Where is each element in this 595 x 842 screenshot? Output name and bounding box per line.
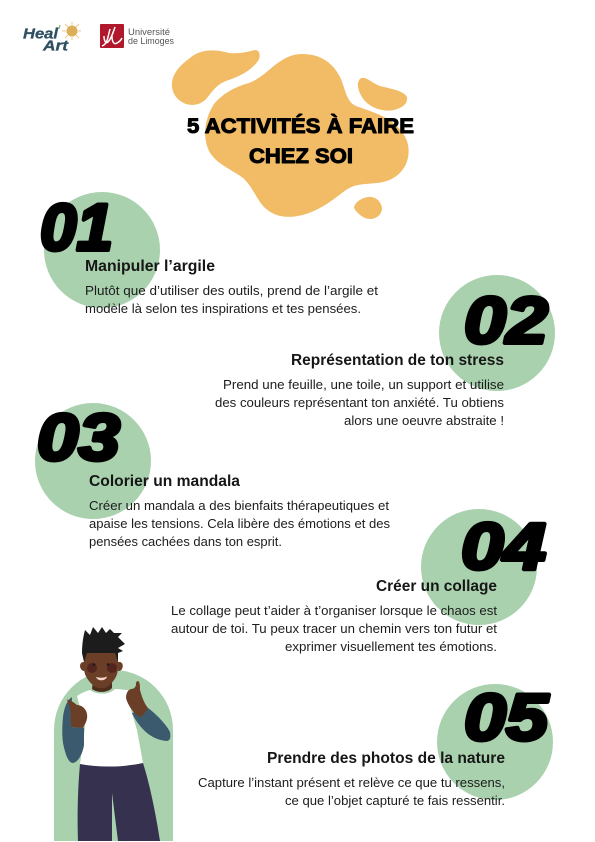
logo: Heal'Art: Art xyxy=(42,38,69,54)
panel: activity 02: des couleurs représentant ton anxiété. Tu obtiens xyxy=(215,396,504,410)
panel: activity 04 xyxy=(171,509,546,654)
panel: activity 03: Colorier un mandala xyxy=(89,473,240,490)
right sleeve xyxy=(132,708,170,741)
logo: Université de Limoges: Université xyxy=(128,27,170,37)
left hand xyxy=(67,700,87,728)
logo: Heal'Art: Heal xyxy=(23,26,59,42)
right hand with thumb xyxy=(126,681,148,717)
panel: activity 02: Représentation de ton stress xyxy=(291,352,504,369)
panel: activity 02 xyxy=(215,275,555,428)
panel: activity 05: Capture l’instant présent et relève ce que tu ressens, xyxy=(198,776,505,790)
decorative orange blob behind the title xyxy=(172,50,409,219)
panel: activity 01: modèle là selon tes inspirations et tes pensées. xyxy=(85,302,361,316)
panel: activity 02: alors une oeuvre abstraite ! xyxy=(344,414,504,428)
left sleeve xyxy=(62,697,84,763)
panel: activity 03: pensées cachées dans ton esprit. xyxy=(89,535,282,549)
eyes xyxy=(93,663,109,666)
neck xyxy=(92,680,112,692)
panel: activity 02: Prend une feuille, une toile, un support et utilise xyxy=(223,378,504,392)
panel: activity 01: Manipuler l’argile xyxy=(85,258,215,275)
head xyxy=(84,653,118,688)
panel: activity 05: Prendre des photos de la nature xyxy=(267,750,505,767)
smile xyxy=(96,676,107,680)
panel: activity 04: Le collage peut t’aider à t’organiser lorsque le chaos est xyxy=(171,604,498,618)
panel: activity 03: apaise les tensions. Cela libère des émotions et des xyxy=(89,517,390,531)
t-shirt xyxy=(77,689,143,767)
panel: activity 04: exprimer visuellement tes émotions. xyxy=(285,640,497,654)
panel: activity 03 xyxy=(35,400,390,549)
panel: activity 04: autour de toi. Tu peux tracer un chemin vers ton futur et xyxy=(171,622,498,636)
panel: activity 05 xyxy=(198,680,553,808)
ears xyxy=(80,662,123,671)
hair xyxy=(82,627,125,662)
logo: Université de Limoges: de Limoges xyxy=(128,36,174,46)
panel: activity 02: 02 xyxy=(464,283,548,357)
illustration: smiling man giving thumbs up on green arch xyxy=(54,627,173,841)
cheeks xyxy=(87,663,117,673)
panel: activity 01: Plutôt que d’utiliser des outils, prend de l’argile et xyxy=(85,284,379,298)
panel: activity 04: Créer un collage xyxy=(376,578,497,595)
panel: activity 05: ce que l’objet capturé te fais ressentir. xyxy=(285,794,505,808)
title xyxy=(187,115,414,168)
panel: activity 01: 01 xyxy=(40,190,113,264)
panel: activity 05: 05 xyxy=(464,680,549,754)
panel: activity 03: Créer un mandala a des bienfaits thérapeutiques et xyxy=(89,499,390,513)
trousers xyxy=(78,763,160,841)
title: 5 ACTIVITÉS À FAIRE xyxy=(187,115,414,138)
green arch background xyxy=(54,670,173,841)
panel: activity 03: 03 xyxy=(37,400,120,474)
panel: activity 01 xyxy=(40,190,379,316)
logo: Université de Limoges xyxy=(100,24,174,48)
logo: Heal'Art xyxy=(23,22,81,54)
title: CHEZ SOI xyxy=(249,145,353,168)
panel: activity 04: 04 xyxy=(461,509,546,583)
